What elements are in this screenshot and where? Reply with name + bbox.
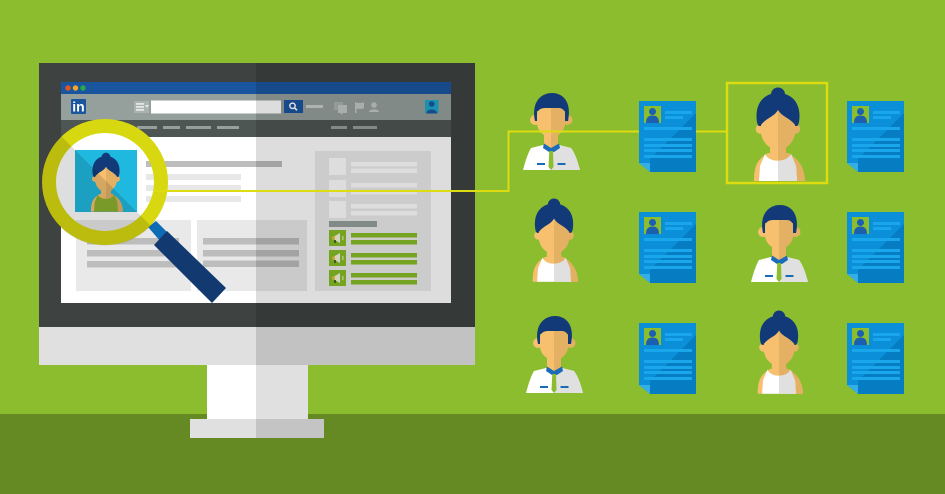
person: man row 1 bbox=[523, 93, 580, 170]
resume row 2 left bbox=[639, 212, 696, 283]
monitor stand neck bbox=[207, 365, 308, 419]
page content area bbox=[61, 137, 451, 303]
monitor bezel bbox=[39, 63, 475, 327]
person: woman row 3 bbox=[758, 311, 803, 394]
flag icon bbox=[355, 102, 364, 113]
person: man row 3 bbox=[526, 316, 583, 393]
search box bbox=[151, 100, 281, 114]
connector line bbox=[154, 132, 727, 191]
linkedin logo: in bbox=[72, 98, 85, 114]
woman in photo bbox=[91, 153, 123, 212]
window buttons bbox=[65, 85, 86, 91]
lens shadow bbox=[42, 136, 151, 246]
lens glass bbox=[55, 132, 155, 232]
resume row 3 right bbox=[847, 323, 904, 394]
person: woman selected bbox=[754, 88, 805, 181]
nav links bbox=[137, 126, 377, 129]
connector over man bbox=[508, 130, 727, 132]
list menu icon bbox=[134, 101, 149, 113]
profile photo bbox=[75, 150, 137, 212]
person: man row 2 bbox=[751, 205, 808, 282]
add contact icon bbox=[369, 102, 379, 112]
card right bbox=[197, 220, 307, 291]
selection box bbox=[727, 83, 827, 183]
monitor bbox=[39, 63, 475, 438]
toolbar bbox=[61, 94, 451, 120]
browser window bbox=[55, 82, 451, 303]
monitor chin bbox=[39, 327, 475, 365]
resume row 3 left bbox=[639, 323, 696, 394]
magnifier shaft bbox=[148, 221, 170, 242]
monitor stand base bbox=[190, 419, 324, 438]
resume row 1 right bbox=[847, 101, 904, 172]
resume row 2 right bbox=[847, 212, 904, 283]
profile heading lines bbox=[146, 161, 282, 202]
magnifier handle bbox=[154, 231, 226, 303]
messages icon bbox=[334, 102, 347, 115]
monitor right shade bbox=[256, 63, 475, 365]
search button bbox=[284, 100, 303, 113]
card left bbox=[76, 220, 191, 291]
magnifier ring bbox=[49, 126, 161, 238]
magnifying glass bbox=[42, 119, 226, 303]
profile avatar bbox=[425, 100, 438, 114]
browser title bar bbox=[61, 82, 451, 94]
ground band bbox=[0, 414, 945, 494]
nav bar bbox=[61, 120, 451, 137]
toolbar dash bbox=[306, 105, 323, 108]
sidebar bbox=[315, 151, 431, 291]
resume row 1 left bbox=[639, 101, 696, 172]
person: woman row 2 bbox=[533, 199, 578, 282]
